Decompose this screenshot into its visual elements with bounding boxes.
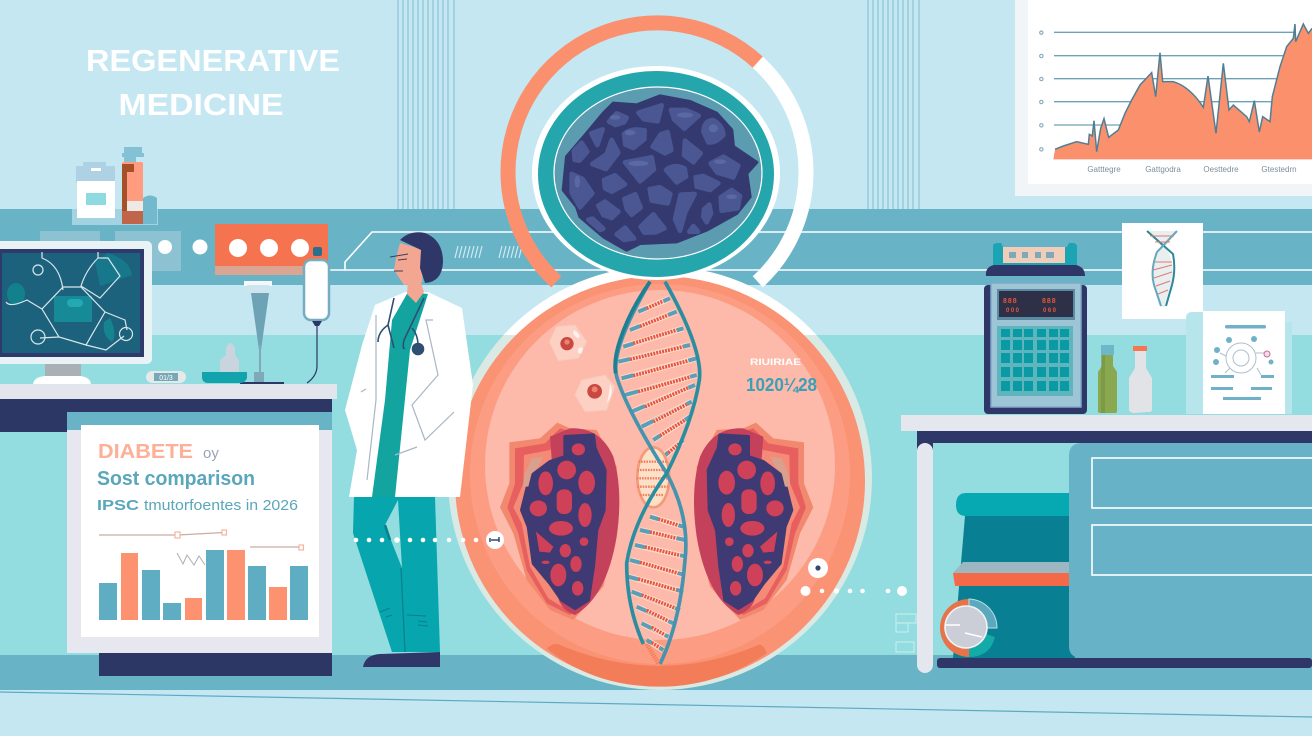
circle stat label: [746, 357, 817, 395]
shoes: [363, 652, 440, 667]
small device on counter: 01/3: [159, 375, 173, 382]
scientist: [345, 232, 473, 667]
data poster: diabetes cost comparison: [67, 425, 332, 676]
coat details: [361, 315, 454, 480]
glass funnel stand: [240, 281, 284, 384]
lab instrument with keypad: 060: [1043, 308, 1058, 314]
large ring around tissue view: [508, 23, 806, 282]
title: REGENERATIVE: [86, 43, 340, 78]
keypad: [997, 326, 1073, 396]
title: MEDICINE: [118, 87, 284, 122]
poster bar chart: [99, 550, 308, 620]
lab instrument with keypad: 888: [1042, 298, 1057, 305]
right counter and cabinet: [901, 415, 1312, 673]
small device on counter: [146, 371, 186, 383]
lab counter left: [0, 384, 337, 432]
monitor with network display: [0, 241, 152, 384]
cell diagram document: [1186, 311, 1292, 414]
poster trend lines: [99, 530, 304, 565]
lab instrument with keypad: [984, 243, 1087, 414]
lab instrument with keypad: 888: [1003, 298, 1018, 305]
cell highlights: [575, 112, 737, 199]
stethoscope: [378, 298, 424, 354]
top chart panel: area chart: Gtestedrn: [1261, 165, 1297, 174]
facial features: [390, 254, 408, 271]
top chart panel: area chart: Oesttedre: [1203, 165, 1239, 174]
poster heading: DIABETE: [98, 441, 193, 463]
right kidney: [694, 423, 813, 620]
top chart panel: area chart: [1015, 0, 1312, 196]
bottles on right counter: [1098, 345, 1152, 413]
clock gauge: [940, 599, 997, 657]
left kidney: [500, 423, 619, 620]
main circle: [448, 266, 872, 690]
circle stat label: 1020¼28: [746, 375, 817, 395]
sample bottle and bowl: [202, 343, 247, 383]
poster heading: [97, 441, 298, 514]
cell illustrations and DNA and kidneys: [500, 282, 813, 664]
bottom crescent: [547, 644, 767, 687]
title: [86, 43, 340, 122]
machine base on right: [953, 493, 1075, 658]
tissue cluster: [563, 96, 757, 250]
connector dots right: [800, 558, 907, 596]
poster heading: Sost comparison: [97, 468, 255, 490]
shelf bottles: [72, 147, 158, 225]
stem cells: [549, 325, 615, 412]
poster heading: IPSC: [97, 497, 139, 514]
IV bag with tube: [304, 247, 329, 383]
neck and face: [407, 280, 424, 303]
top chart panel: area chart: Gatttegre: [1087, 165, 1121, 174]
top chart panel: area chart: Gattgodra: [1145, 165, 1181, 174]
tissue view oval: [532, 66, 780, 280]
DNA double helix: [615, 282, 700, 664]
connector dots left: [354, 531, 504, 549]
lab coat: [345, 292, 473, 497]
control panel with indicator dots: [40, 224, 328, 275]
poster heading: oy: [203, 445, 219, 462]
sketch labels near clock: [896, 614, 916, 652]
poster heading: tmutorfoentes in 2026: [144, 498, 298, 514]
legs: [353, 497, 440, 652]
DNA poster: [1122, 223, 1203, 319]
scrubs: [372, 292, 428, 497]
lab instrument with keypad: 000: [1006, 308, 1021, 314]
hair: [400, 232, 443, 283]
circle stat label: RIUIRIAE: [750, 357, 801, 368]
